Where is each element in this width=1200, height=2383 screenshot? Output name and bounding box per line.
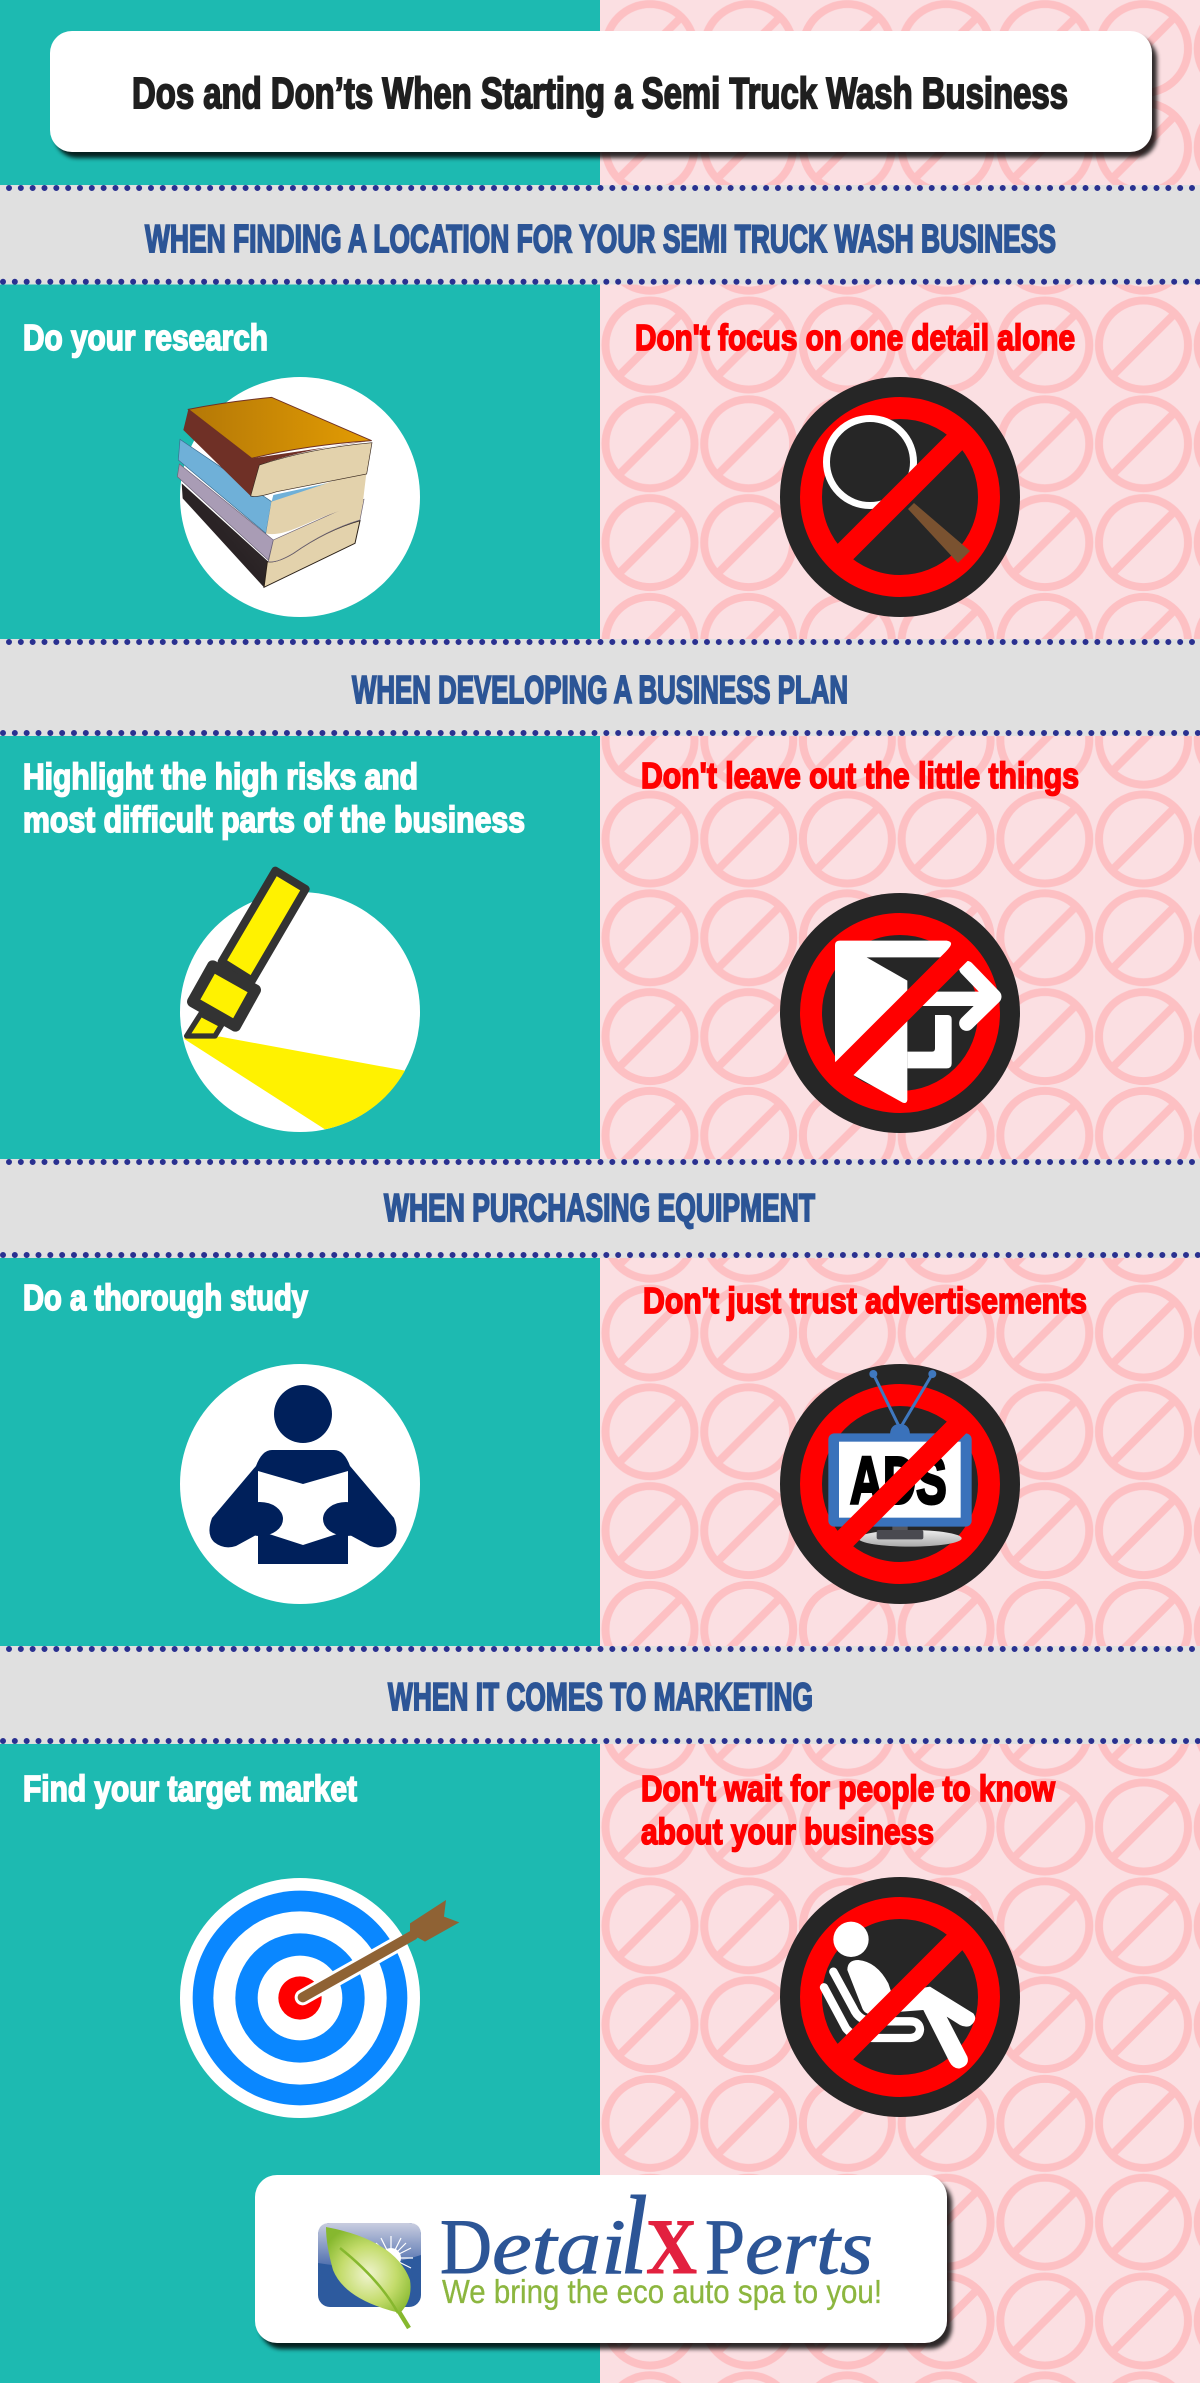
icon: no TV ads: ADS — [850, 1444, 947, 1518]
icon: no TV ads — [780, 1364, 1020, 1604]
logo wordmark: P — [705, 2203, 745, 2290]
logo icon: leaf and sun — [318, 2223, 421, 2328]
section heading: marketing: WHEN IT COMES TO MARKETING — [388, 1676, 813, 1719]
do text: research: Do your research — [23, 317, 268, 358]
section heading: equipment — [0, 1159, 1200, 1258]
icon: person reading — [180, 1364, 420, 1604]
don't text: little things: Don't leave out the little things — [641, 755, 1079, 796]
icon: target with arrow — [180, 1878, 459, 2118]
don't text: waiting: Don't wait for people to know — [641, 1768, 1056, 1809]
section heading: location — [0, 185, 1200, 284]
don't text: advertisements: Don't just trust advertisements — [643, 1280, 1087, 1321]
section heading: equipment: WHEN PURCHASING EQUIPMENT — [384, 1187, 815, 1230]
do text: thorough study: Do a thorough study — [23, 1277, 308, 1318]
icon: no magnifying glass — [780, 377, 1020, 617]
icon: stack of books — [177, 377, 420, 617]
don't text: one detail: Don't focus on one detail alone — [635, 317, 1075, 358]
do text: highlight risks: most difficult parts of the business — [23, 799, 525, 840]
logo panel — [255, 2174, 952, 2349]
logo wordmark: l — [620, 2174, 648, 2298]
logo wordmark: D — [440, 2203, 492, 2290]
do text: target market: Find your target market — [23, 1768, 357, 1809]
background: pink don't column — [600, 0, 1200, 2383]
background: teal do column — [0, 0, 600, 2383]
don't text: waiting — [641, 1768, 1056, 1852]
title banner — [50, 31, 1157, 158]
logo tagline: We bring the eco auto spa to you! — [442, 2273, 882, 2310]
logo wordmark: X — [646, 2203, 697, 2290]
do text: highlight risks — [23, 756, 525, 840]
don't text: waiting: about your business — [641, 1811, 934, 1852]
do text: highlight risks: Highlight the high risks and — [23, 756, 418, 797]
logo wordmark: etai — [492, 2203, 626, 2290]
section heading: business plan: WHEN DEVELOPING A BUSINESS PLAN — [352, 669, 848, 712]
icon: no sitting and waiting — [780, 1877, 1020, 2117]
logo wordmark: erts — [745, 2203, 873, 2290]
section heading: business plan — [0, 639, 1200, 736]
section heading: marketing — [0, 1646, 1200, 1744]
icon: no exit door — [780, 893, 1020, 1133]
icon: highlighter — [180, 871, 420, 1132]
